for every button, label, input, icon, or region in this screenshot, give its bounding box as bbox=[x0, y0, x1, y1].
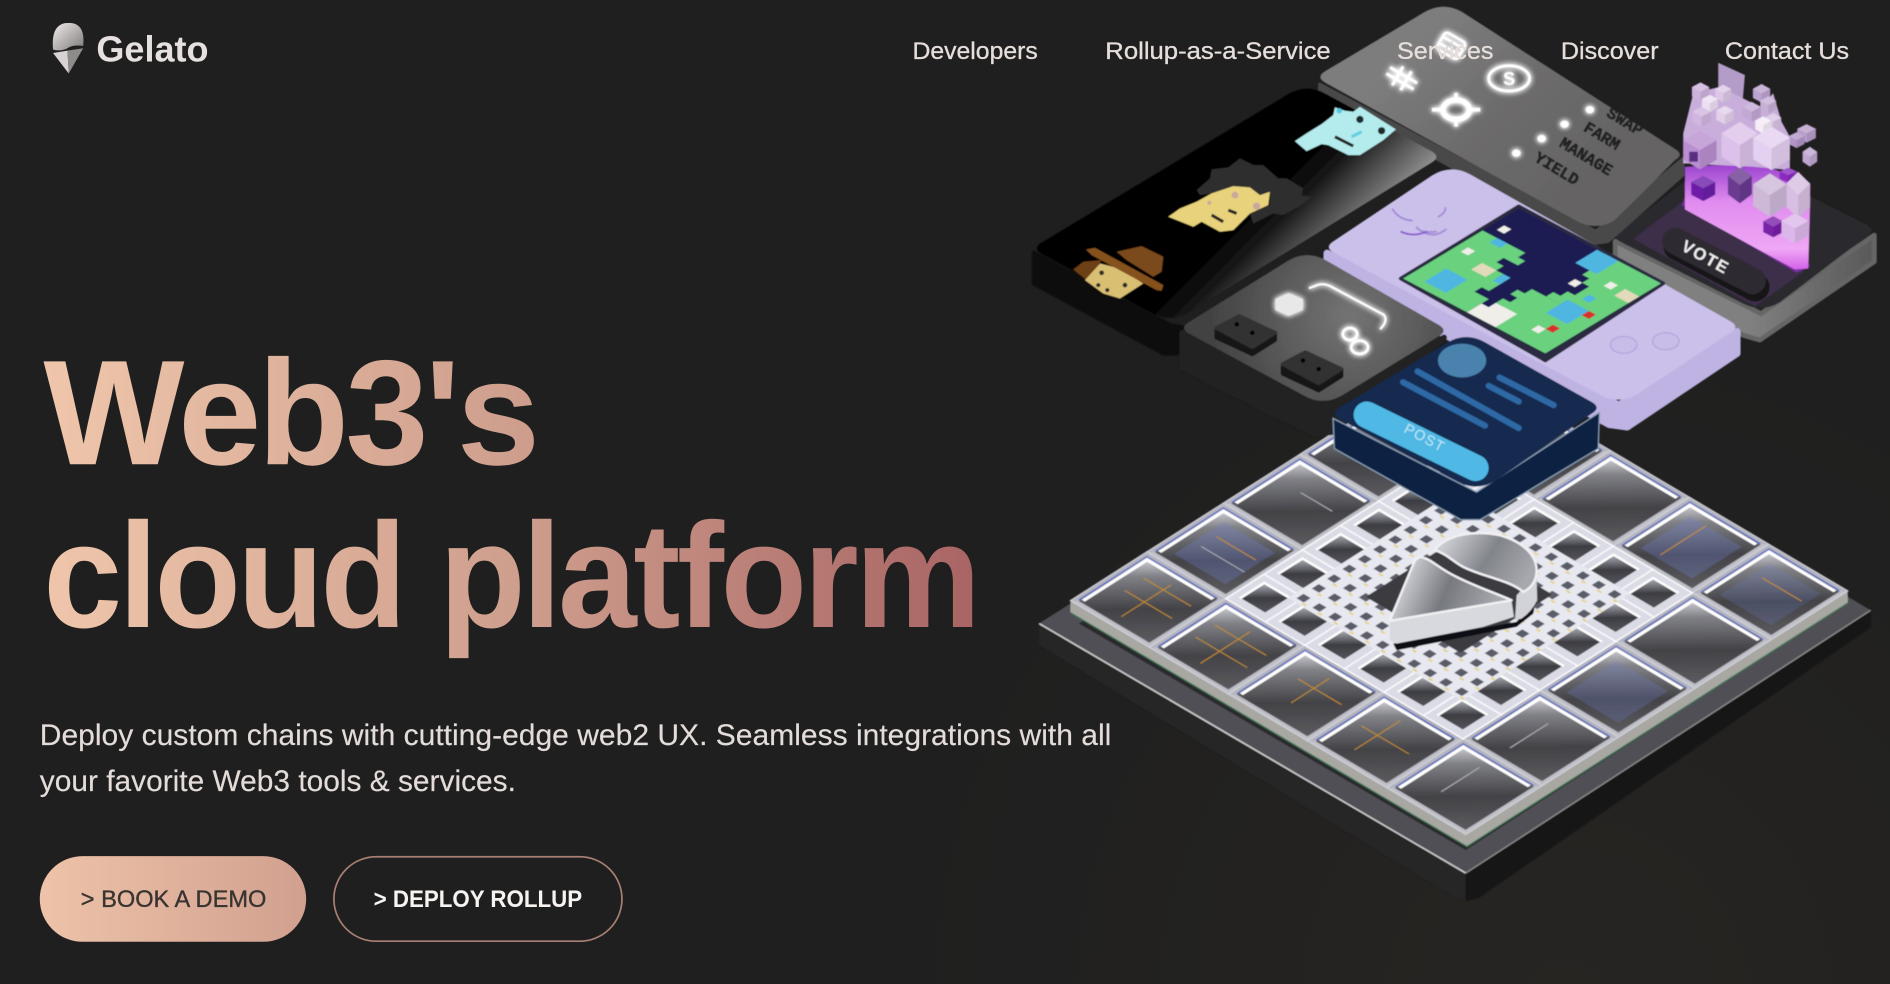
menu labels: FARM bbox=[1580, 118, 1623, 155]
tile: social post: POST bbox=[1401, 421, 1448, 456]
avatar circle bbox=[1438, 344, 1486, 377]
logo scoop top bbox=[1435, 533, 1537, 592]
menu dots bbox=[1512, 106, 1594, 157]
glass base platform bbox=[1039, 362, 1871, 901]
vote button: VOTE bbox=[1678, 236, 1733, 278]
tile: defi services bbox=[1320, 7, 1683, 244]
icon: chain node bbox=[1275, 293, 1303, 316]
icon: dollar cross bbox=[1383, 61, 1421, 96]
avatar: yellow with dark hair bbox=[1168, 158, 1312, 232]
navigation: Services bbox=[1397, 38, 1493, 65]
tile: nft avatars bbox=[1034, 89, 1436, 353]
tile: vote bbox=[1615, 159, 1874, 340]
navigation: Developers bbox=[912, 38, 1038, 65]
title: cloud platform bbox=[43, 492, 978, 659]
console buttons bbox=[1610, 333, 1679, 353]
post text lines bbox=[1403, 371, 1554, 428]
socket left bbox=[1216, 316, 1275, 355]
icon: ring bbox=[1432, 93, 1480, 127]
title bbox=[43, 329, 978, 659]
title: Web3's bbox=[43, 329, 536, 496]
logo bbox=[53, 23, 209, 74]
description: your favorite Web3 tools & services. bbox=[40, 765, 516, 798]
tile: game console bbox=[1327, 169, 1737, 427]
icon: usdc coin bbox=[1489, 66, 1530, 91]
logo scoop side bbox=[1515, 574, 1537, 620]
icon: stack bbox=[1436, 31, 1467, 60]
navigation: Discover bbox=[1561, 38, 1659, 65]
socket right bbox=[1282, 352, 1342, 391]
centre glass Gelato logo bbox=[1390, 533, 1537, 650]
description bbox=[40, 719, 1111, 798]
description: Deploy custom chains with cutting-edge web2 UX. Seamless integrations with all bbox=[40, 719, 1111, 752]
menu labels: SWAP bbox=[1603, 104, 1646, 140]
logo wordmark: Gelato bbox=[96, 28, 209, 70]
isometric illustration bbox=[1034, 7, 1874, 901]
glass grid of cells bbox=[1070, 357, 1848, 834]
console d-pad bbox=[1392, 207, 1446, 235]
post button bbox=[1367, 415, 1475, 468]
navigation: Contact Us bbox=[1725, 38, 1849, 65]
logo icon bbox=[53, 23, 83, 74]
icon: infinity bbox=[1343, 328, 1368, 354]
crystal voting sculpture bbox=[1682, 63, 1817, 273]
navigation bbox=[912, 38, 1849, 65]
button: deploy rollup: > DEPLOY ROLLUP bbox=[374, 886, 582, 913]
tile: integrations bbox=[1182, 255, 1444, 434]
logo cone side bbox=[1390, 600, 1514, 644]
button: book a demo bbox=[40, 856, 306, 942]
menu labels: MANAGE bbox=[1556, 134, 1616, 180]
avatar: brown hat bbox=[1073, 246, 1163, 298]
icon: usdc coin: S bbox=[1503, 69, 1515, 89]
button: book a demo: > BOOK A DEMO bbox=[81, 886, 266, 913]
console screen map bbox=[1401, 206, 1663, 361]
logo cone top bbox=[1391, 557, 1512, 621]
vote button bbox=[1675, 236, 1755, 287]
menu labels bbox=[1531, 104, 1646, 190]
navigation: Rollup-as-a-Service bbox=[1105, 38, 1331, 65]
button: deploy rollup bbox=[334, 857, 622, 941]
avatar: cyan bbox=[1295, 107, 1396, 155]
glowing connector bbox=[1309, 284, 1386, 329]
tile: social post bbox=[1333, 337, 1600, 520]
menu labels: YIELD bbox=[1531, 148, 1582, 190]
